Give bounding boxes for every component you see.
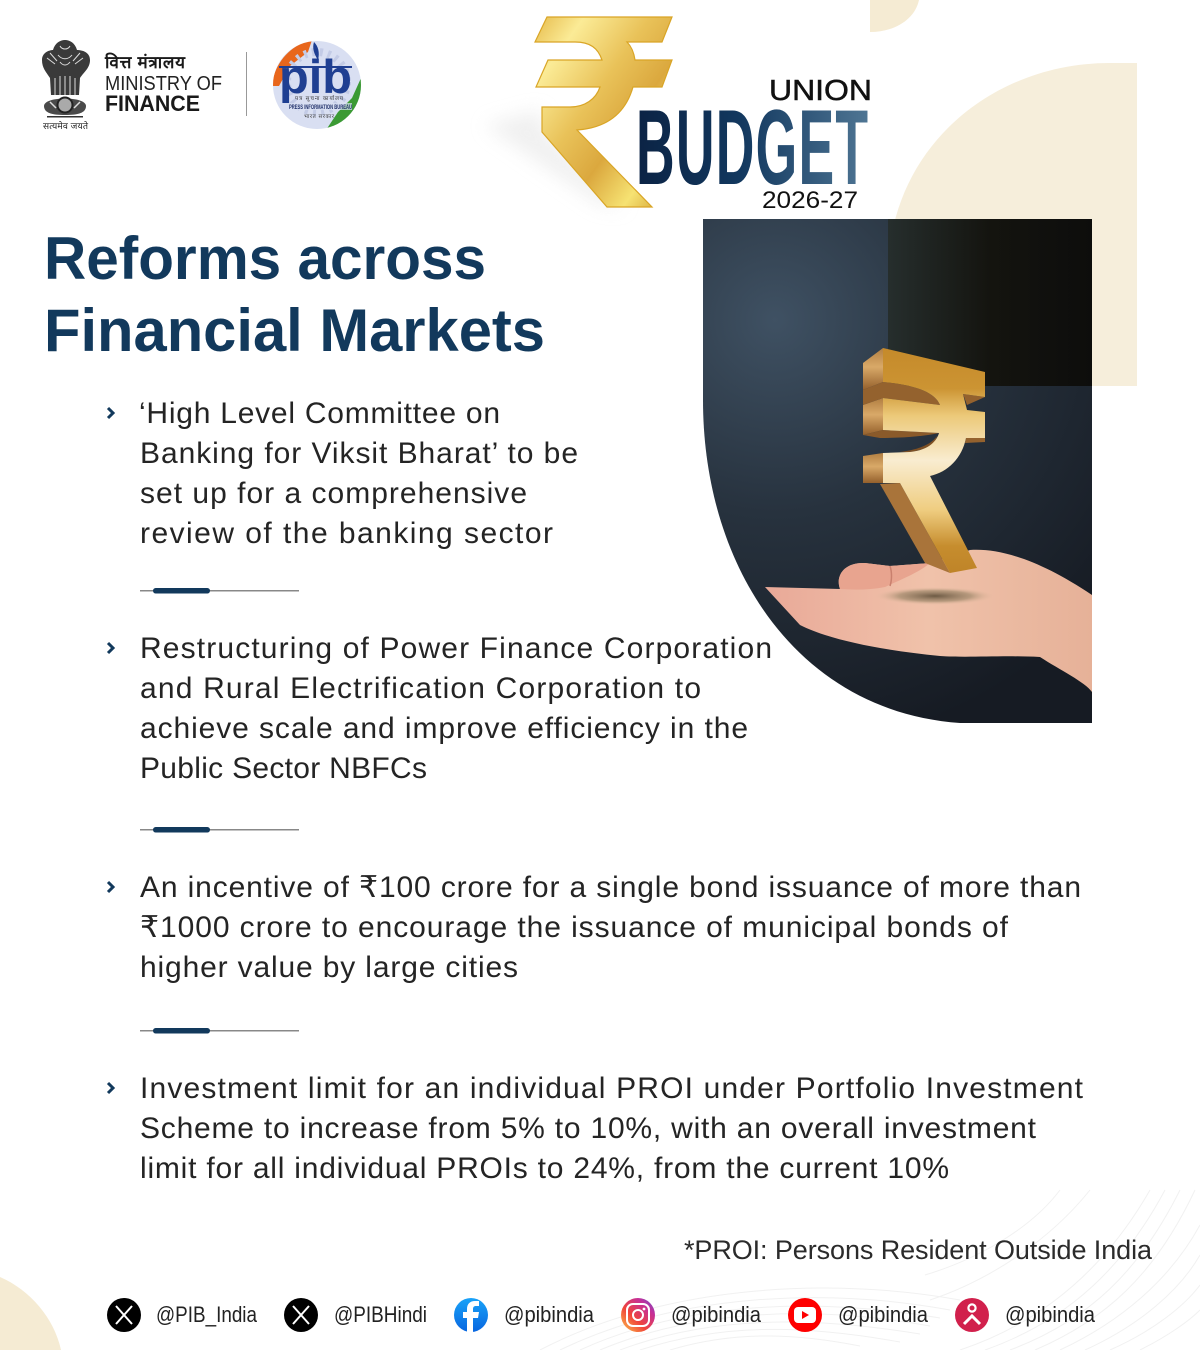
logo: PIB: भारत सरकार	[304, 114, 335, 120]
icon: chevron	[108, 643, 113, 653]
logo: PIB: pib	[279, 50, 352, 103]
logo: PIB: पत्र सूचना कार्यालय	[295, 95, 344, 102]
bullet 2: achieve scale and improve efficiency in the	[140, 712, 748, 745]
bullet 1	[108, 397, 578, 550]
bullet 1: Banking for Viksit Bharat’ to be	[140, 437, 578, 470]
social bar: @pibindia	[504, 1302, 595, 1327]
logo: ministry of finance: FINANCE	[105, 91, 200, 116]
budget logo	[485, 17, 872, 214]
bullet 4	[108, 1072, 1084, 1185]
logo: ministry of finance: वित्त मंत्रालय	[104, 52, 186, 72]
social bar: @pibindia	[1005, 1302, 1096, 1327]
footnote: *PROI: Persons Resident Outside India	[684, 1235, 1153, 1265]
bullet 1: set up for a comprehensive	[140, 477, 527, 510]
decorative beige shape top	[870, 0, 919, 32]
title: Financial Markets	[44, 297, 545, 364]
decorative beige shape bottom left	[0, 1277, 61, 1350]
bullet 4: Investment limit for an individual PROI under Portfolio Investment	[140, 1072, 1084, 1105]
title	[44, 225, 545, 364]
bullet 4: limit for all individual PROIs to 24%, from the current 10%	[140, 1152, 949, 1185]
decorative beige shape right	[888, 63, 1137, 386]
icon: gold rupee shadow	[485, 110, 625, 207]
icon: chevron	[108, 1083, 113, 1093]
icon: gold rupee	[535, 17, 672, 207]
logo: PIB	[272, 40, 365, 130]
icon: X	[284, 1298, 318, 1332]
icon: national emblem: सत्यमेव जयते	[43, 120, 89, 131]
social bar: @pibindia	[671, 1302, 762, 1327]
icon: koo	[955, 1298, 989, 1332]
social bar	[107, 1298, 1096, 1332]
budget logo: 2026-27	[762, 187, 858, 214]
social bar: @PIB_India	[156, 1302, 258, 1327]
icon: X	[107, 1298, 141, 1332]
logo: ministry of finance	[42, 40, 222, 131]
icon: 3D rupee	[863, 348, 985, 573]
icon: national emblem	[42, 40, 90, 131]
bullet 2: Restructuring of Power Finance Corporation	[140, 632, 772, 665]
bullet 3: An incentive of ₹100 crore for a single bond issuance of more than	[140, 871, 1081, 904]
bullet 2: and Rural Electrification Corporation to	[140, 672, 701, 705]
photo panel: hand holding rupee	[703, 219, 1092, 723]
title: Reforms across	[44, 225, 486, 292]
icon: chevron	[108, 882, 113, 892]
bullet 2	[108, 632, 772, 785]
logo: ministry of finance: MINISTRY OF	[105, 73, 222, 95]
bullet 4: Scheme to increase from 5% to 10%, with an overall investment	[140, 1112, 1037, 1145]
budget logo: UNION	[769, 75, 872, 107]
icon: hand	[765, 550, 1092, 692]
budget logo: BUDGET	[636, 87, 869, 207]
bullet 3: higher value by large cities	[140, 951, 518, 984]
icon: instagram	[621, 1298, 655, 1332]
bullet 1: review of the banking sector	[140, 517, 553, 550]
icon: chevron	[108, 408, 113, 418]
social bar: @pibindia	[838, 1302, 929, 1327]
icon: facebook	[454, 1298, 488, 1332]
bullet 1: ‘High Level Committee on	[139, 397, 500, 430]
bullet 3	[108, 871, 1081, 984]
bullet 3: ₹1000 crore to encourage the issuance of municipal bonds of	[140, 911, 1009, 944]
bullet 2: Public Sector NBFCs	[140, 752, 427, 785]
social bar: @PIBHindi	[334, 1302, 427, 1327]
icon: youtube	[788, 1298, 822, 1332]
logo: PIB: PRESS INFORMATION BUREAU	[289, 105, 352, 111]
